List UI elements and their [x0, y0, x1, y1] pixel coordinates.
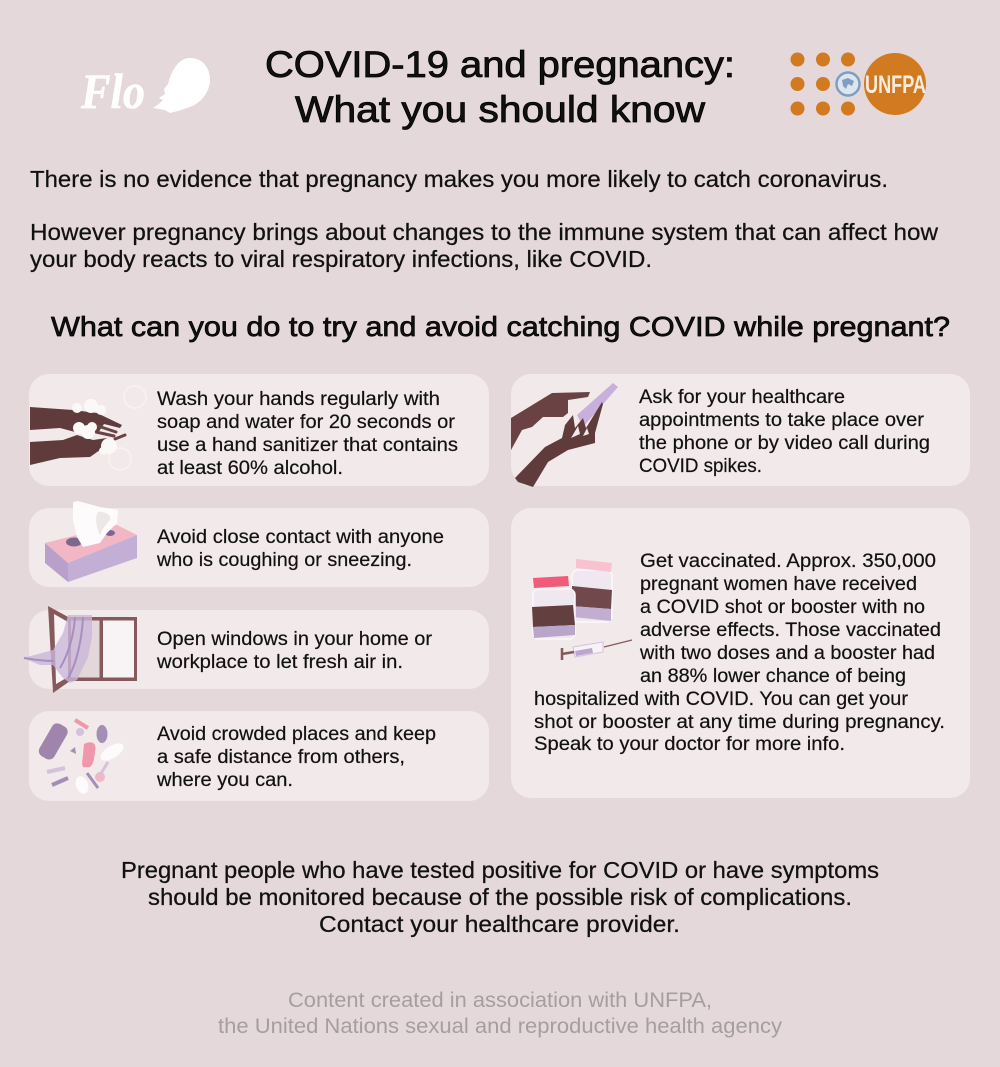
panel: wash hands: at least 60% alcohol.	[157, 458, 343, 479]
panel: get vaccinated: a COVID shot or booster with no	[640, 597, 925, 618]
logo: Flo: Flo	[80, 63, 145, 119]
intro text	[30, 166, 938, 272]
panel: get vaccinated: shot or booster at any time during pregnancy.	[534, 712, 945, 733]
panel: open windows	[23, 606, 489, 693]
panel: remote appointments	[511, 374, 970, 487]
panel: get vaccinated: Get vaccinated. Approx. 350,000	[640, 551, 936, 572]
closing message: Pregnant people who have tested positive for COVID or have symptoms	[121, 857, 879, 883]
closing message: Contact your healthcare provider.	[319, 911, 680, 937]
panel: avoid crowded places: Avoid crowded places and keep	[157, 724, 436, 745]
panel: get vaccinated	[511, 508, 970, 798]
footer credit	[218, 989, 783, 1038]
logo: Flo	[80, 58, 210, 119]
section heading: What can you do to try and avoid catching COVID while pregnant?	[51, 311, 950, 342]
panel: avoid close contact: who is coughing or sneezing.	[156, 550, 412, 571]
panel: wash hands	[29, 374, 489, 486]
panel: get vaccinated: with two doses and a booster had	[639, 643, 935, 664]
panel: open windows: Open windows in your home or	[157, 629, 433, 650]
intro text: However pregnancy brings about changes to the immune system that can affect how	[30, 219, 938, 245]
panel: avoid close contact	[29, 501, 489, 587]
intro text: your body reacts to viral respiratory infections, like COVID.	[30, 246, 652, 272]
icon: germs	[37, 720, 126, 796]
logo: UNFPA: UNFPA	[865, 71, 926, 99]
icon: hands holding phone	[511, 383, 618, 487]
panel: get vaccinated: hospitalized with COVID. You can get your	[534, 689, 909, 710]
logo: UNFPA	[790, 52, 926, 116]
panel: remote appointments: Ask for your healthcare	[639, 387, 845, 408]
panel: get vaccinated: adverse effects. Those vaccinated	[640, 620, 941, 641]
title	[265, 44, 735, 130]
panel: avoid crowded places: a safe distance from others,	[157, 747, 405, 768]
icon: open window with curtain	[23, 606, 137, 693]
title: What you should know	[295, 89, 705, 130]
panel: get vaccinated: pregnant women have received	[640, 574, 917, 595]
panel: wash hands: Wash your hands regularly with	[157, 389, 440, 410]
panel: avoid close contact: Avoid close contact with anyone	[157, 527, 444, 548]
panel: remote appointments: the phone or by video call during	[639, 433, 930, 454]
panel: wash hands: soap and water for 20 seconds or	[157, 412, 456, 433]
title: COVID-19 and pregnancy:	[265, 44, 735, 85]
icon: vaccine vials and syringe	[532, 559, 632, 660]
footer credit: Content created in association with UNFPA,	[288, 989, 712, 1012]
footer credit: the United Nations sexual and reproductive health agency	[218, 1015, 783, 1038]
panel: avoid crowded places: where you can.	[156, 770, 293, 791]
panel: remote appointments: COVID spikes.	[639, 456, 762, 477]
panel: avoid crowded places	[29, 711, 489, 801]
panel: get vaccinated: Speak to your doctor for more info.	[534, 734, 845, 755]
closing message	[121, 857, 879, 937]
panel: get vaccinated: an 88% lower chance of being	[640, 666, 906, 687]
panel: wash hands: use a hand sanitizer that contains	[157, 435, 458, 456]
closing message: should be monitored because of the possible risk of complications.	[148, 884, 852, 910]
icon: tissue box	[45, 501, 137, 582]
icon: washing hands	[30, 386, 146, 470]
panel: remote appointments: appointments to take place over	[639, 410, 925, 431]
intro text: There is no evidence that pregnancy makes you more likely to catch coronavirus.	[30, 166, 888, 192]
panel: open windows: workplace to let fresh air in.	[156, 652, 403, 673]
